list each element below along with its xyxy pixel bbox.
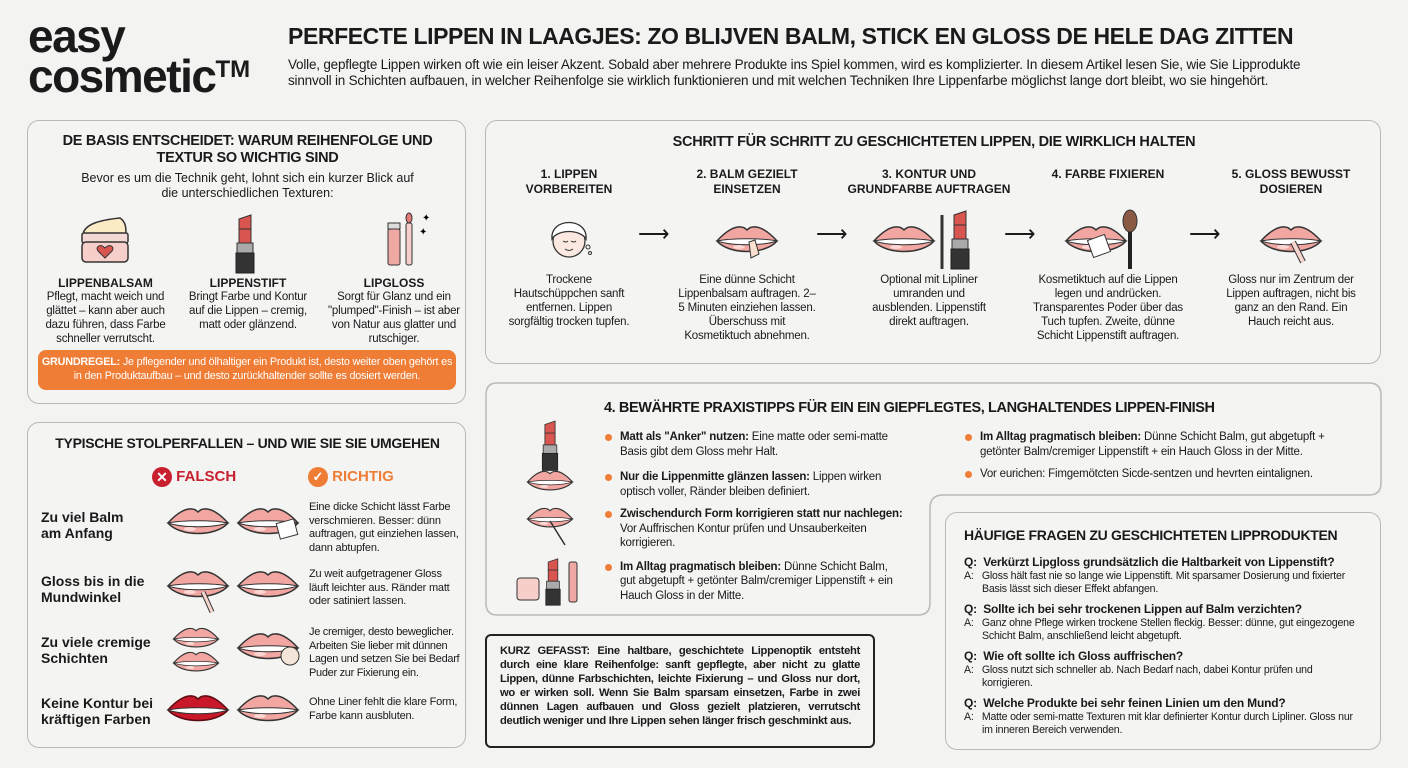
panel: basis bbox=[27, 120, 466, 404]
callout: grundregel: GRUNDREGEL: Je pflegender und ölhaltiger ein Produkt ist, desto weiter oben gehört es in den Produktaufbau – und desto zurückhaltender sollte es dosiert werden. bbox=[42, 356, 452, 382]
step 1 bbox=[509, 167, 629, 328]
tips list right bbox=[965, 431, 1325, 480]
panel: schritte: Gloss nur im Zentrum der Lippen auftragen, nicht bis ganz an den Rand. Ein Hauch reicht aus. bbox=[1226, 274, 1356, 328]
faq heading: HÄUFIGE FRAGEN ZU GESCHICHTETEN LIPPRODUKTEN bbox=[964, 527, 1337, 543]
tips list right: Vor eurichen: Fimgemötcten Sicde-sentzen und hevrten eintalignen. bbox=[980, 468, 1313, 480]
row 1: Eine dicke Schicht lässt Farbe verschmieren. Besser: dünn auftragen, gut einziehen lassen, dann abtupfen. bbox=[309, 501, 459, 554]
icon: lipgloss: ✦ bbox=[419, 227, 427, 238]
panel: schritte: Trockene Hautschüppchen sanft entfernen. Lippen sorgfältig trocken tupfen. bbox=[509, 274, 629, 328]
arrow 1: ⟶ bbox=[638, 221, 670, 246]
faq list: A: Ganz ohne Pflege wirken trockene Stellen fleckig. Besser: dünne, gut eingezogene Schicht Balm, anschließend leicht abgetupft. bbox=[964, 617, 1355, 642]
stolperfallen heading: TYPISCHE STOLPERFALLEN – UND WIE SIE SIE UMGEHEN bbox=[55, 435, 440, 451]
row 1: Zu viel Balm bbox=[41, 509, 123, 525]
texture: gloss: Sorgt für Glanz und ein "plumped"-Finish – ist aber von Natur aus glatter und rutschiger. bbox=[328, 291, 460, 345]
arrow 3: ⟶ bbox=[1004, 221, 1036, 246]
step 4 bbox=[1033, 167, 1183, 342]
faq list: Q: Wie oft sollte ich Gloss auffrischen? bbox=[964, 649, 1183, 663]
falsch label bbox=[152, 467, 236, 487]
basis intro bbox=[81, 171, 414, 200]
intro text: Volle, gepflegte Lippen wirken oft wie ein leiser Akzent. Sobald aber mehrere Produkte ins Spiel kommen, wird es komplizierter. In diesem Artikel lesen Sie, wie Sie Lipprodukte sinnvoll in Schichten aufbauen, in welcher Reihenfolge sie wirklich funktionieren und mit welchen Techniken Ihre Lippenfarbe möglichst lange dort bleibt, wo sie hingehört. bbox=[288, 57, 1300, 88]
panel: schritte: Eine dünne Schicht Lippenbalsam auftragen. 2–5 Minuten einziehen lassen. Überschuss mit Kosmetiktuch abnehmen. bbox=[678, 274, 816, 342]
texture: gloss: LIPGLOSS bbox=[364, 276, 424, 290]
step 2: EINSETZEN bbox=[713, 182, 781, 196]
panel: schritte: Optional mit Lipliner umranden und ausblenden. Lippenstift direkt auftragen. bbox=[872, 274, 986, 328]
icon: tip lips bbox=[526, 470, 574, 490]
faq list bbox=[964, 555, 1355, 736]
step 4: 4. FARBE FIXIEREN bbox=[1052, 167, 1164, 181]
row 4 bbox=[41, 695, 457, 727]
row 2: Gloss bis in die bbox=[41, 573, 144, 589]
faq list: Q: Verkürzt Lipgloss grundsätzlich die Haltbarkeit von Lippenstift? bbox=[964, 555, 1334, 569]
tips list left: Zwischendurch Form korrigieren statt nur nachlegen: Vor Auffrischen Kontur prüfen und Unsauberkeiten korrigieren. bbox=[620, 508, 902, 549]
panel: schritte: Kosmetiktuch auf die Lippen legen und andrücken. Transparentes Poder über das Tuch tupfen. Zweite, dünne Schicht Lippenstift auftragen. bbox=[1033, 274, 1183, 342]
basis intro: Bevor es um die Technik geht, lohnt sich ein kurzer Blick auf bbox=[81, 171, 414, 185]
row 1: am Anfang bbox=[41, 525, 113, 541]
texture: stift: Bringt Farbe und Kontur auf die Lippen – cremig, matt oder glänzend. bbox=[189, 291, 307, 331]
step 5: 5. GLOSS BEWUSST bbox=[1232, 167, 1350, 181]
row 1 bbox=[41, 501, 459, 554]
faq list: A: Gloss hält fast nie so lange wie Lippenstift. Mit sparsamer Dosierung und fixierter Basis lässt sich dieser Effekt abfangen. bbox=[964, 570, 1345, 595]
texture: balsam: Pflegt, macht weich und glättet – kann aber auch dazu führen, dass Farbe schneller verrutscht. bbox=[45, 291, 166, 345]
panel: faq bbox=[945, 512, 1381, 750]
falsch label: ✕ bbox=[156, 469, 168, 485]
title: PERFECTE LIPPEN IN LAAGJES: ZO BLIJVEN BALM, STICK EN GLOSS DE HELE DAG ZITTEN bbox=[288, 23, 1293, 49]
step 1: VORBEREITEN bbox=[526, 182, 612, 196]
callout: grundregel bbox=[38, 350, 456, 390]
step 3: GRUNDFARBE AUFTRAGEN bbox=[848, 182, 1010, 196]
step 3: 3. KONTUR UND bbox=[882, 167, 976, 181]
step 5: DOSIEREN bbox=[1260, 182, 1322, 196]
row 2: Zu weit aufgetragener Gloss läuft leichter aus. Ränder matt oder satiniert lassen. bbox=[309, 568, 450, 607]
logo: cosmeticTM bbox=[28, 50, 250, 102]
row 3 bbox=[41, 626, 460, 678]
summary box bbox=[485, 634, 875, 748]
row 2: Mundwinkel bbox=[41, 589, 121, 605]
basis heading bbox=[63, 133, 432, 166]
tips list left bbox=[605, 431, 902, 602]
row 3: Je cremiger, desto beweglicher. Arbeiten Sie lieber mit dünnen Lagen und setzen Sie bei Bedarf Puder zur Fixierung ein. bbox=[309, 626, 459, 678]
faq list: Q: Sollte ich bei sehr trockenen Lippen auf Balm verzichten? bbox=[964, 602, 1302, 616]
panel: schritte bbox=[485, 120, 1381, 364]
icon: lipstick bbox=[236, 214, 254, 274]
step 2 bbox=[678, 167, 816, 342]
panel: stolperfallen bbox=[27, 422, 466, 748]
icon: lipgloss: ✦ bbox=[422, 213, 430, 224]
icon: tip lipstick bbox=[542, 420, 558, 471]
summary box: KURZ GEFASST: Eine haltbare, geschichtete Lippenoptik entsteht durch eine klare Reihenfolge: sanft gepflegte, aber nicht zu glatte Lippen, dünne Farbschichten, leichte Fixierung – und Gloss nur dort, wo er wirken soll. Wenn Sie Balm sparsam einsetzen, Farbe in zwei dünnen Lagen aufbauen und Gloss gezielt platzieren, verrutscht deutlich weniger und Ihre Lippen sehen länger frisch geschminkt aus. bbox=[500, 645, 860, 727]
row 2 bbox=[41, 568, 450, 613]
tips list left: Nur die Lippenmitte glänzen lassen: Lippen wirken optisch voller, Ränder bleiben definiert. bbox=[620, 471, 881, 498]
basis heading: DE BASIS ENTSCHEIDET: WARUM REIHENFOLGE UND bbox=[63, 133, 432, 149]
richtig label: ✓ bbox=[313, 469, 323, 484]
logo bbox=[28, 10, 250, 102]
icon: tip products bbox=[516, 558, 578, 606]
richtig label: RICHTIG bbox=[332, 468, 394, 485]
icon: tip lips swab bbox=[526, 508, 574, 546]
row 4: Ohne Liner fehlt die klare Form, Farbe kann ausbluten. bbox=[309, 696, 457, 722]
steps heading: SCHRITT FÜR SCHRITT ZU GESCHICHTETEN LIPPEN, DIE WIRKLICH HALTEN bbox=[673, 134, 1195, 150]
icon: lipgloss bbox=[388, 212, 430, 266]
texture: balsam: LIPPENBALSAM bbox=[58, 276, 153, 290]
arrow 2: ⟶ bbox=[816, 221, 848, 246]
step 5 bbox=[1226, 167, 1356, 328]
falsch label: FALSCH bbox=[176, 468, 236, 485]
row 4: Keine Kontur bei bbox=[41, 695, 153, 711]
icon: balm jar bbox=[81, 217, 129, 263]
faq list: A: Gloss nutzt sich schneller ab. Nach Bedarf nach, dabei Kontur prüfen und korrigieren. bbox=[964, 664, 1313, 689]
basis intro: die unterschiedlichen Texturen: bbox=[161, 186, 334, 200]
faq list: A: Matte oder semi-matte Texturen mit klar definierter Kontur durch Lipliner. Gloss nur im inneren Bereich verwenden. bbox=[964, 711, 1353, 736]
logo: easy bbox=[28, 10, 124, 62]
tips list left: Matt als "Anker" nutzen: Eine matte oder semi-matte Basis gibt dem Gloss mehr Halt. bbox=[620, 431, 888, 458]
row 3: Zu viele cremige bbox=[41, 634, 151, 650]
basis heading: TEXTUR SO WICHTIG SIND bbox=[157, 150, 338, 166]
faq list: Q: Welche Produkte bei sehr feinen Linien um den Mund? bbox=[964, 696, 1285, 710]
tips list right: Im Alltag pragmatisch bleiben: Dünne Schicht Balm, gut abgetupft + getönter Balm/cremiger Lippenstift + ein Hauch Gloss in der Mitte. bbox=[980, 431, 1325, 458]
step 1: 1. LIPPEN bbox=[541, 167, 597, 181]
tips list left: Im Alltag pragmatisch bleiben: Dünne Schicht Balm, gut abgetupft + getönter Balm/cremiger Lippenstift + ein Hauch Gloss in der Mitte. bbox=[620, 560, 893, 602]
row 3: Schichten bbox=[41, 650, 108, 666]
richtig label bbox=[308, 467, 394, 487]
step 3 bbox=[848, 167, 1010, 328]
panel: praxistipps bbox=[485, 382, 1382, 616]
row 4: kräftigen Farben bbox=[41, 711, 151, 727]
tips heading: 4. BEWÄHRTE PRAXISTIPPS FÜR EIN EIN GIEPFLEGTES, LANGHALTENDES LIPPEN-FINISH bbox=[604, 400, 1215, 416]
texture: stift: LIPPENSTIFT bbox=[210, 276, 286, 290]
arrow 4: ⟶ bbox=[1189, 221, 1221, 246]
step 2: 2. BALM GEZIELT bbox=[696, 167, 798, 181]
